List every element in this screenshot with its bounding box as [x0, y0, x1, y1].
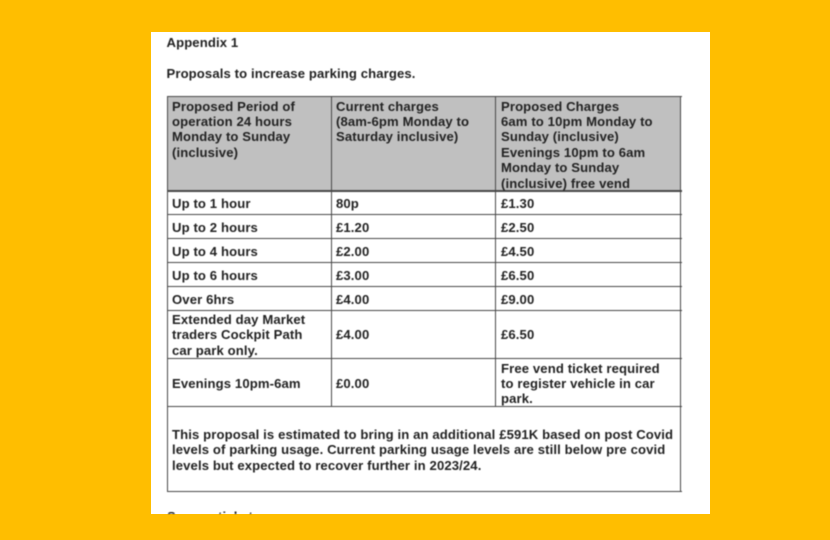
row: up to 4 hours: [172, 244, 534, 260]
column 3 header: Proposed Charges: [501, 98, 619, 114]
row: evenings: [172, 360, 660, 406]
row: over 6 hours: £9.00: [501, 292, 534, 306]
row: up to 6 hours: £6.50: [501, 268, 534, 282]
column 3 header: Evenings 10pm to 6am: [501, 145, 645, 160]
row: up to 2 hours: £2.50: [501, 220, 534, 234]
row: over 6 hours: Over 6hrs: [172, 292, 234, 306]
row: evenings: Free vend ticket required: [501, 360, 660, 376]
column 2 header: Saturday inclusive): [336, 129, 458, 144]
row: extended day: £6.50: [501, 327, 534, 342]
row: up to 2 hours: £1.20: [336, 220, 369, 234]
text block: revenue note: levels of parking usage. Current parking usage levels are still below pre covid: [172, 442, 665, 457]
column 1 header: (inclusive): [172, 145, 238, 160]
row: evenings: to register vehicle in car: [501, 376, 655, 391]
row: evenings: £0.00: [336, 376, 369, 391]
row: up to 2 hours: [172, 220, 534, 236]
row: extended day: £4.00: [336, 327, 369, 342]
column 2 header: Current charges: [336, 98, 439, 114]
text block: revenue note: This proposal is estimated to bring in an additional £591K based on post Covid: [172, 427, 673, 442]
row: evenings: Evenings 10pm-6am: [172, 376, 301, 391]
column 2 header: [336, 98, 470, 144]
column 3 header: (inclusive) free vend: [501, 176, 630, 191]
row: extended day: Extended day Market: [172, 312, 305, 327]
column 1 header: [172, 98, 296, 160]
row: up to 6 hours: Up to 6 hours: [172, 268, 258, 282]
text block: revenue note: [171, 427, 673, 474]
row: up to 1 hour: Up to 1 hour: [172, 196, 251, 210]
row: up to 2 hours: Up to 2 hours: [172, 220, 258, 234]
column 1 header: Proposed Period of: [172, 98, 295, 114]
row: up to 4 hours: £4.50: [501, 244, 534, 258]
table header background: [167, 96, 681, 190]
heading: proposals: Proposals to increase parking charges.: [166, 66, 416, 81]
row: up to 1 hour: £1.30: [501, 196, 534, 210]
row: up to 1 hour: 80p: [336, 196, 359, 210]
column 1 header: Monday to Sunday: [172, 129, 290, 144]
column 2 header: (8am-6pm Monday to: [336, 114, 469, 129]
row: over 6 hours: [172, 292, 534, 306]
text block: revenue note: levels but expected to recover further in 2023/24.: [172, 458, 481, 473]
column 1 header: operation 24 hours: [172, 114, 292, 129]
row: extended day: [171, 312, 534, 358]
row: evenings: park.: [501, 391, 533, 406]
row: up to 6 hours: [172, 268, 534, 284]
column 3 header: [500, 98, 653, 191]
document page: [151, 32, 710, 514]
column 3 header: Sunday (inclusive): [501, 129, 619, 144]
row: up to 4 hours: £2.00: [336, 244, 369, 258]
column 3 header: Monday to Sunday: [501, 160, 619, 175]
row: extended day: car park only.: [172, 343, 258, 358]
row: up to 6 hours: £3.00: [336, 268, 369, 282]
table: parking charges: [166, 95, 683, 493]
row: over 6 hours: £4.00: [336, 292, 369, 306]
column 3 header: 6am to 10pm Monday to: [501, 114, 653, 129]
row: up to 1 hour: [172, 196, 534, 212]
heading: appendix: Appendix 1: [166, 35, 238, 50]
row: extended day: traders Cockpit Path: [172, 327, 302, 342]
row: up to 4 hours: Up to 4 hours: [172, 244, 258, 258]
